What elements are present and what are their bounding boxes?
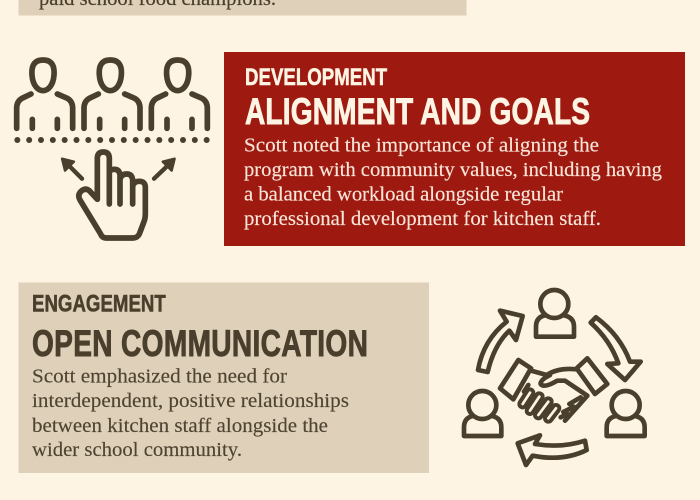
label: development: DEVELOPMENT <box>245 62 388 91</box>
text: engagement description: wider school community. <box>32 439 242 461</box>
heading: open communication: OPEN COMMUNICATION <box>32 322 368 364</box>
panel: development <box>224 52 685 246</box>
icon part: right arrow <box>591 317 641 380</box>
text: engagement description: between kitchen staff alongside the <box>32 415 328 437</box>
panel: top partial card <box>18 0 466 16</box>
icon part: bottom arrow <box>518 435 587 465</box>
icon part: top person <box>536 290 574 337</box>
icon part: right arrow <box>154 159 175 179</box>
text: engagement description <box>32 366 349 461</box>
icon part: pointing hand <box>79 152 145 238</box>
text: development description: a balanced workload alongside regular <box>244 184 563 206</box>
text: engagement description: Scott emphasized the need for <box>32 366 287 388</box>
icon: people selected by hand <box>14 60 210 238</box>
text: development description: professional development for kitchen staff. <box>244 208 601 230</box>
icon part: right person <box>607 391 645 436</box>
panel: engagement <box>18 282 429 473</box>
icon part: left arrow <box>62 159 82 179</box>
icon: handshake cycle <box>464 290 645 465</box>
heading: alignment and goals: ALIGNMENT AND GOALS <box>245 90 590 132</box>
icon part: left person <box>464 391 501 436</box>
icon part: three people <box>17 60 207 128</box>
text: development description: program with community values, including having <box>244 159 662 181</box>
icon part: upper left arrow <box>478 311 523 372</box>
text: engagement description: interdependent, positive relationships <box>32 390 349 412</box>
label: engagement: ENGAGEMENT <box>32 289 166 317</box>
text: development description <box>244 134 662 230</box>
icon part: dotted line <box>14 137 210 143</box>
icon part: handshake <box>500 358 607 421</box>
text: development description: Scott noted the importance of aligning the <box>244 134 599 156</box>
